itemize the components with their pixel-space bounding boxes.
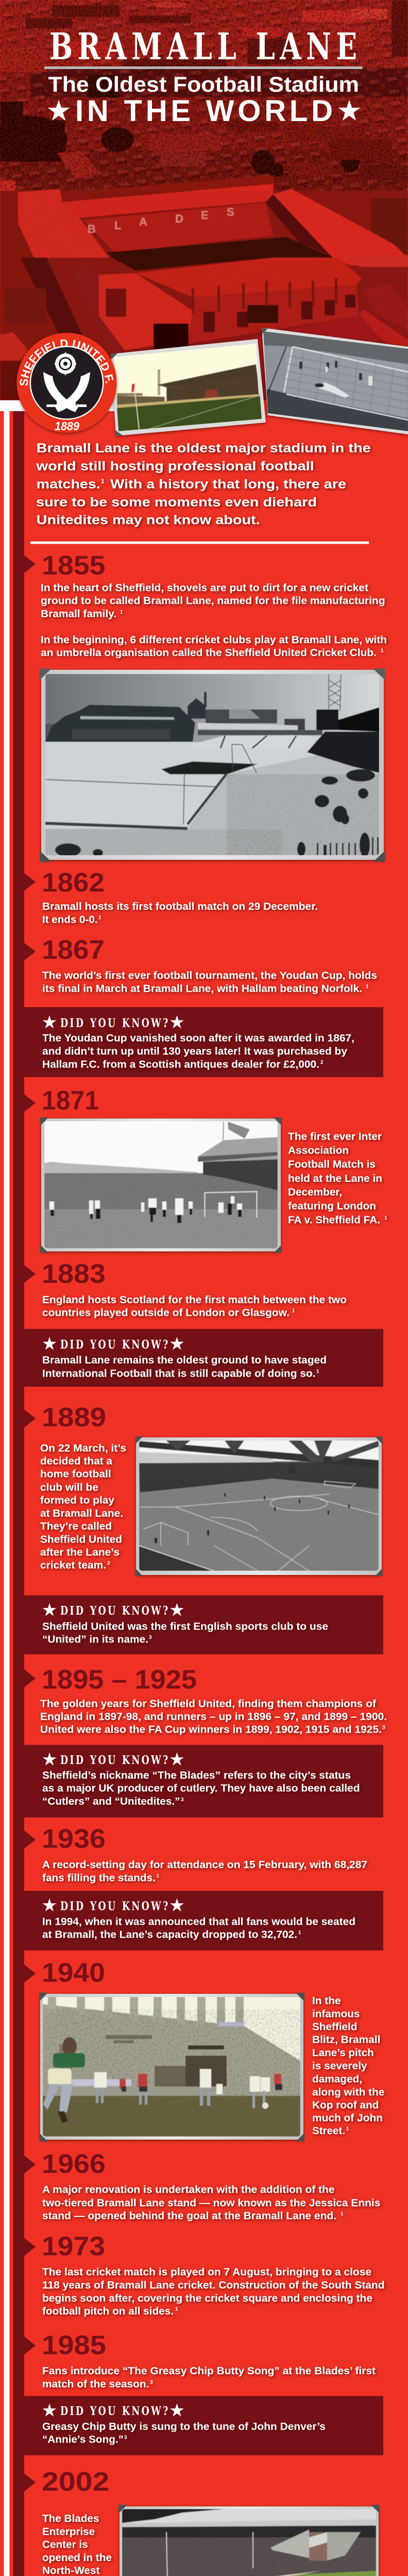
text: 1889 entry: at Bramall Lane. [40, 1508, 123, 1519]
photo: black and white goal dive, tilted [260, 327, 408, 435]
text: 1940 entry: is severely [312, 2061, 367, 2072]
icon: crossed blades [43, 372, 90, 412]
text: 1940 entry: Blitz, Bramall [312, 2035, 380, 2046]
header photo: aerial view of the stadium in red duotone [0, 0, 408, 400]
title [44, 25, 363, 128]
callout body: International Football that is still capable of doing so. [42, 1368, 316, 1379]
callout heading: DID YOU KNOW? [60, 1604, 168, 1618]
callout heading: DID YOU KNOW? [60, 1337, 168, 1351]
callout body: 3 [124, 2435, 127, 2441]
icon: star right [170, 1752, 184, 1766]
callout: did you know, seated capacity [24, 1891, 383, 1951]
text: 1855 entry [41, 583, 387, 658]
callout body: Greasy Chip Butty is sung to the tune of John Denver’s [42, 2421, 326, 2433]
text: 1871 entry: 1 [384, 1215, 387, 1221]
badge: Sheffield United F.C. crest [15, 333, 118, 436]
intro text: world still hosting professional football [36, 459, 314, 473]
text: 1855 entry: ground to be called Bramall Lane, named for the file manufacturing [41, 596, 385, 607]
callout body: The Youdan Cup vanished soon after it was awarded in 1867, [42, 1033, 354, 1044]
text: 1889 entry: club will be [40, 1482, 98, 1493]
callout body: Bramall Lane remains the oldest ground to have staged [42, 1355, 327, 1366]
text: 1855 entry: Bramall family. [41, 608, 116, 620]
text: 1985 entry: Fans introduce “The Greasy Chip Butty Song” at the Blades’ first [42, 2365, 376, 2377]
text: 1855 entry: 1 [120, 609, 123, 615]
text: 1889 entry [40, 1443, 126, 1571]
callout body: “United” in its name. [42, 1634, 148, 1646]
callout body: at Bramall, the Lane’s capacity dropped to 32,702. [42, 1929, 297, 1941]
text: 1889 entry: 3 [107, 1561, 110, 1566]
text: 1940 entry: along with the [312, 2087, 384, 2098]
text: 1940 entry: much of John [312, 2112, 383, 2124]
title rule [44, 66, 363, 69]
text: 1895 to 1925 entry: The golden years for Sheffield United, finding them champions of [40, 1698, 376, 1709]
header photo: aerial view of the stadium in red duotone: L [114, 219, 121, 232]
goalkeeper [43, 2037, 85, 2123]
text: 1889 entry: On 22 March, it’s [40, 1443, 126, 1454]
text: 1895 to 1925 entry: United were also the FA Cup winners in 1899, 1902, 1915 and 1925. [40, 1724, 382, 1735]
text: 1867 entry: its final in March at Bramall Lane, with Hallam beating Norfolk. [42, 983, 362, 994]
callout body: 3 [181, 1797, 184, 1803]
text: 1889 entry: cricket team. [40, 1560, 106, 1571]
callout body: 3 [149, 1635, 152, 1640]
text: 1871 entry: held at the Lane in [288, 1173, 382, 1184]
intro text [36, 441, 371, 528]
icon: right star [338, 100, 360, 121]
text: 1895 to 1925 entry: England in 1897-98, and runners – up in 1896 – 97, and 1899 – 1900. [40, 1711, 387, 1722]
text: 1940 entry: Sheffield [312, 2022, 357, 2033]
callout: did you know, Youdan Cup [24, 1007, 383, 1077]
callout body: 1 [298, 1930, 301, 1936]
text: 1862 entry: 1 [98, 915, 101, 921]
text: 1883 entry: England hosts Scotland for the first match between the two [42, 1294, 347, 1306]
text: 1871 entry: FA v. Sheffield FA. [288, 1215, 380, 1226]
year marker: 1895 to 1925: 1895 – 1925 [42, 1665, 197, 1695]
text: 1973 entry [42, 2267, 384, 2317]
text: 1889 entry: home football [40, 1469, 111, 1480]
text: 1883 entry: countries played outside of London or Glasgow. [42, 1307, 290, 1318]
icon: star right [170, 2403, 184, 2416]
text: 1862 entry: It ends 0-0. [42, 914, 98, 926]
text: 1936 entry [42, 1859, 367, 1884]
icon: star left [43, 1015, 56, 1028]
callout body: “Annie’s Song.” [42, 2434, 124, 2446]
intro text: matches. [37, 477, 100, 492]
callout: did you know, United in name [24, 1596, 383, 1654]
callout: did you know, the Blades nickname [24, 1745, 383, 1818]
text: 1940 entry [312, 1995, 384, 2137]
icon: star right [170, 1015, 184, 1028]
text: 1867 entry [42, 970, 377, 994]
callout body: Hallam F.C. from a Scottish antiques dealer for £2,000. [42, 1059, 319, 1071]
callout body [42, 1621, 328, 1646]
text: 1855 entry: In the beginning, 6 different cricket clubs play at Bramall Lane, with [41, 634, 387, 646]
text: 2002 entry [42, 2513, 112, 2576]
callout: did you know, oldest international ground [24, 1329, 383, 1387]
photo: modern stadium with crowd and green pitch, 2002 [118, 2505, 383, 2576]
text: 1936 entry: fans filling the stands. [42, 1873, 156, 1884]
year marker: 1966: 1966 [42, 2149, 106, 2179]
header photo: aerial view of the stadium in red duotone: D [175, 212, 183, 225]
callout body [42, 1917, 355, 1941]
callout body [42, 1355, 327, 1379]
header photo: aerial view of the stadium in red duotone: B [88, 223, 96, 235]
text: 1867 entry: 1 [366, 984, 369, 990]
intro text: Bramall Lane is the oldest major stadium in the [37, 441, 371, 455]
text: 1871 entry: Football Match is [288, 1159, 376, 1171]
text: 1985 entry: match of the season. [42, 2379, 149, 2390]
text: 1973 entry: 1 [175, 2307, 178, 2312]
year marker: 1883: 1883 [42, 1259, 106, 1289]
in the world line: IN THE WORLD [75, 94, 333, 128]
year marker: 1973: 1973 [42, 2231, 105, 2261]
callout heading: DID YOU KNOW? [60, 1016, 168, 1030]
text: 1871 entry: featuring London [288, 1201, 376, 1212]
text: 2002 entry: opened in the [42, 2552, 112, 2564]
header photo: aerial view of the stadium in red duotone: S [227, 206, 234, 218]
year marker: 1985: 1985 [42, 2330, 106, 2360]
text: 1889 entry: They’re called [40, 1521, 112, 1532]
icon: star left [43, 1899, 56, 1911]
text: 1936 entry: A record-setting day for attendance on 15 February, with 68,287 [42, 1859, 367, 1871]
icon: star right [170, 1603, 184, 1616]
text: 2002 entry: The Blades [42, 2513, 99, 2524]
header photo: aerial view of the stadium in red duotone: E [201, 209, 209, 222]
text: 1966 entry: 1 [341, 2211, 344, 2217]
text: 1966 entry: stand — opened behind the goal at the Bramall Lane end. [42, 2210, 336, 2222]
icon: star left [43, 1337, 56, 1350]
text: 1871 entry: The first ever Inter [288, 1131, 382, 1143]
text: 1862 entry: Bramall hosts its first football match on 29 December. [42, 901, 318, 912]
year marker: 1867: 1867 [42, 935, 105, 965]
icon: left star [48, 100, 70, 121]
callout body: 1 [316, 1369, 319, 1375]
callout body [42, 2421, 326, 2446]
photo: colour stand view, tilted [111, 339, 266, 438]
text: 1867 entry: The world’s first ever football tournament, the Youdan Cup, holds [42, 970, 377, 981]
text: 1966 entry [42, 2184, 380, 2222]
text: 1889 entry: decided that a [40, 1456, 113, 1467]
callout body: Sheffield United was the first English sports club to use [42, 1621, 328, 1632]
callout body: “Cutlers” and “Unitedites.” [42, 1796, 180, 1807]
text: 1889 entry: Sheffield United [40, 1534, 122, 1545]
white band under header photo [0, 400, 124, 411]
photo: snow-covered ground, 1855 [40, 669, 385, 862]
text: 2002 entry: Enterprise [42, 2526, 95, 2537]
photo: crowd and pitch from the roof, 1889 [135, 1436, 382, 1576]
callout heading: DID YOU KNOW? [60, 1899, 168, 1913]
text: 1973 entry: begins soon after, covering the cricket square and enclosing the [42, 2293, 372, 2304]
year marker: 1936: 1936 [42, 1824, 106, 1854]
year marker: 2002: 2002 [42, 2467, 109, 2497]
text: 1940 entry: Kop roof and [312, 2099, 379, 2111]
text: 1940 entry: infamous [312, 2009, 360, 2020]
icon: star right [170, 1899, 184, 1911]
callout heading: DID YOU KNOW? [60, 2404, 168, 2418]
year marker: 1940: 1940 [42, 1958, 105, 1988]
year marker: 2002 [24, 2467, 109, 2497]
photo: players before the damaged stand, 1940 [39, 1993, 304, 2142]
text: 1871 entry: Association [288, 1145, 349, 1156]
text: 1895 to 1925 entry: 3 [382, 1725, 385, 1731]
text: 1862 entry [42, 901, 318, 926]
text: 1940 entry: Street. [312, 2125, 345, 2137]
text: 1889 entry: after the Lane’s [40, 1547, 120, 1558]
intro text: Unitedites may not know about. [37, 513, 260, 528]
text: 1883 entry: 1 [292, 1308, 295, 1314]
text: 2002 entry: Center is [42, 2539, 88, 2551]
subtitle: The Oldest Football Stadium [48, 72, 359, 96]
text: 1855 entry: 1 [381, 648, 384, 654]
year marker: 1862: 1862 [42, 868, 105, 898]
text: 1889 entry: formed to play [40, 1495, 115, 1506]
year marker: 1889: 1889 [42, 1402, 106, 1432]
text: 1936 entry: 1 [157, 1873, 160, 1879]
year marker: 1855: 1855 [42, 551, 105, 581]
text: 1940 entry: Lane’s pitch [312, 2047, 374, 2059]
intro text: 1 [101, 478, 105, 485]
callout: did you know, Annie's Song [24, 2396, 383, 2455]
text: 1883 entry [42, 1294, 347, 1318]
text: 1855 entry: In the heart of Sheffield, shovels are put to dirt for a new cricket [41, 583, 368, 594]
photo: inter association match, 1871 [40, 1117, 282, 1253]
header photo: aerial view of the stadium in red duotone: A [139, 215, 147, 228]
text: 1966 entry: two-tiered Bramall Lane stand — now known as the Jessica Ennis [42, 2197, 380, 2209]
text: 1973 entry: 118 years of Bramall Lane cricket. Construction of the South Stand [42, 2280, 384, 2291]
timeline stripes [4, 411, 24, 2576]
icon: star left [43, 1752, 56, 1766]
icon: rose [54, 352, 77, 376]
text: 1985 entry [42, 2365, 376, 2390]
callout body [42, 1770, 360, 1807]
text: 1973 entry: football pitch on all sides. [42, 2306, 174, 2317]
icon: star left [43, 2403, 56, 2416]
year marker: 1871: 1871 [42, 1086, 99, 1115]
callout body: 2 [320, 1060, 324, 1065]
text: 1940 entry: 1 [346, 2126, 349, 2132]
intro divider [30, 541, 369, 544]
text: 1855 entry: an umbrella organisation called the Sheffield United Cricket Club. [41, 647, 377, 658]
callout body: as a major UK producer of cutlery. They have also been called [42, 1783, 360, 1794]
callout body: In 1994, when it was announced that all fans would be seated [42, 1917, 355, 1928]
intro text: sure to be some moments even diehard [36, 495, 317, 510]
text: 1966 entry: A major renovation is undertaken with the addition of the [42, 2184, 335, 2196]
text: 1895 to 1925 entry [40, 1698, 387, 1735]
text: 1871 entry: December, [288, 1187, 342, 1198]
icon: star right [170, 1337, 184, 1350]
callout body: Sheffield’s nickname “The Blades” refers to the city’s status [42, 1770, 351, 1782]
intro text: With a history that long, there are [110, 477, 346, 492]
callout heading: DID YOU KNOW? [60, 1753, 168, 1767]
text: 1940 entry: In the [312, 1995, 341, 2007]
callout body: and didn’t turn up until 130 years later! It was purchased by [42, 1046, 348, 1057]
icon: star left [43, 1603, 56, 1616]
text: 1973 entry: The last cricket match is played on 7 August, bringing to a close [42, 2267, 371, 2278]
text: 1871 entry [288, 1131, 387, 1226]
text: 1940 entry: damaged, [312, 2074, 362, 2085]
callout body [42, 1033, 354, 1071]
title: Bramall Lane: BRAMALL LANE [49, 25, 357, 68]
crest year: 1889 [55, 419, 79, 433]
text: 1985 entry: 3 [150, 2380, 153, 2385]
